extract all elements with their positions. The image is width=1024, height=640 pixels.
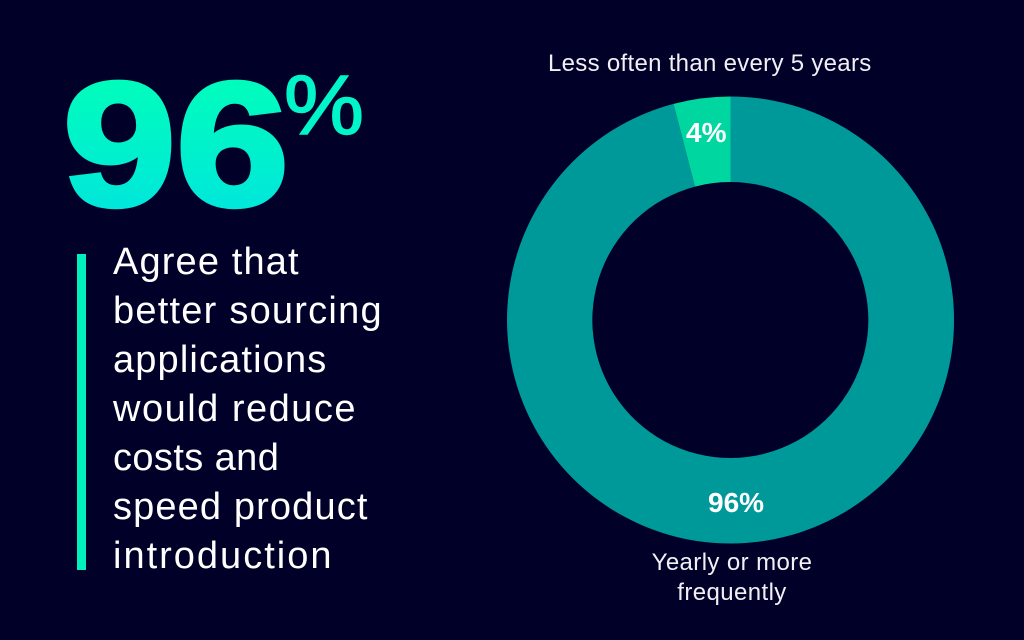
donut chart bbox=[507, 96, 954, 544]
description text bbox=[113, 241, 383, 577]
description text: would reduce bbox=[113, 388, 357, 430]
description text: Agree that bbox=[113, 241, 300, 283]
label: less often than every 5 years: Less often than every 5 years bbox=[548, 50, 872, 77]
big statistic 96%: 96 bbox=[63, 47, 289, 243]
segment: 4% less often bbox=[674, 96, 730, 187]
description text: costs and bbox=[113, 437, 279, 479]
description text: better sourcing bbox=[113, 290, 383, 332]
accent bar bbox=[77, 254, 86, 570]
description text: introduction bbox=[113, 535, 333, 577]
label: yearly or more frequently bbox=[652, 549, 812, 606]
value: 96%: 96% bbox=[708, 487, 764, 518]
big statistic 96%: % bbox=[284, 58, 364, 152]
description text: applications bbox=[113, 339, 327, 381]
description text: speed product bbox=[113, 486, 369, 528]
segment: 96% yearly or more frequently bbox=[507, 96, 954, 544]
label: yearly or more frequently: frequently bbox=[677, 579, 787, 606]
value: 4%: 4% bbox=[686, 117, 726, 148]
label: yearly or more frequently: Yearly or more bbox=[652, 549, 812, 576]
big statistic 96% bbox=[63, 47, 364, 243]
